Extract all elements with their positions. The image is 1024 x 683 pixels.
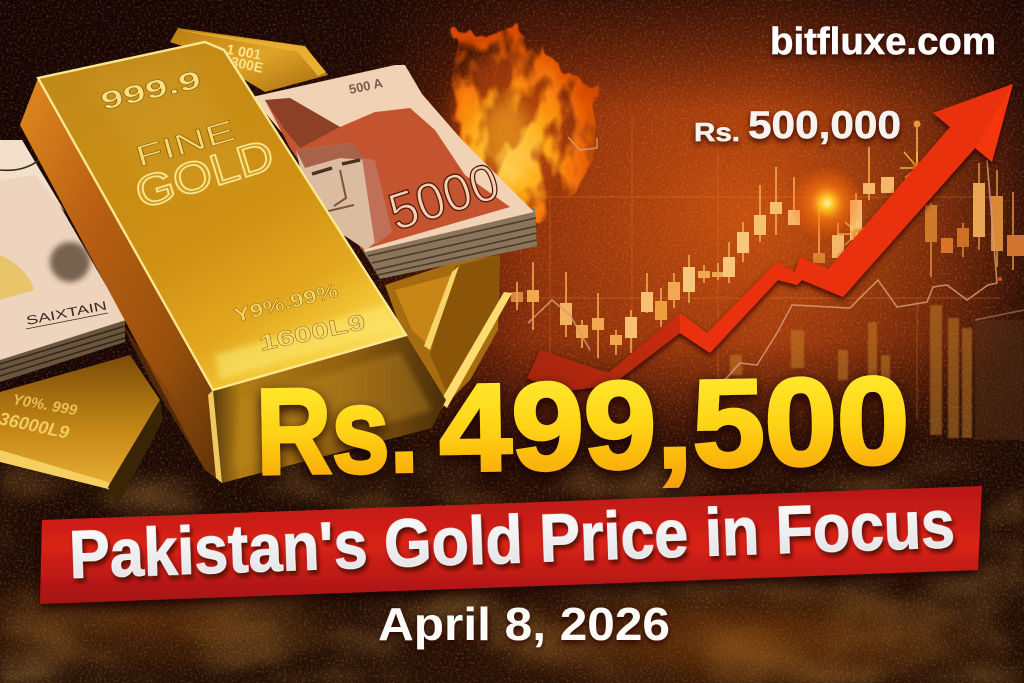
back gold bar: .1 001 <box>221 40 263 63</box>
back gold bar <box>170 28 328 92</box>
banknote stack right: 5000 rupees <box>252 65 537 279</box>
dim lower bars <box>730 305 1024 440</box>
date: April 8, 2026 <box>378 598 670 650</box>
headline price: Rs. 499,500: 499,500 <box>438 352 910 498</box>
banknote stack right: 5000 rupees: 5000 <box>382 153 506 242</box>
banknote stack left <box>0 140 126 382</box>
chart grid <box>500 115 1000 420</box>
stamped bar text: GOLD <box>130 130 280 219</box>
candlestick chart <box>511 120 1024 358</box>
note portrait <box>296 143 392 250</box>
thin price line <box>528 137 1024 382</box>
stamped bar text: Y9%.99% <box>232 281 340 327</box>
brand: bitfluxe.com: bitfluxe.com <box>770 21 996 63</box>
red title banner <box>40 486 982 604</box>
value label: Rs. 500,000: 500,000 <box>748 104 901 147</box>
back gold bar: 300E <box>229 53 265 76</box>
stamped bar text <box>98 66 368 356</box>
value label: Rs. 500,000 <box>694 104 901 147</box>
glow and sparkles <box>789 152 934 250</box>
value label: Rs. 500,000: Rs. <box>694 117 740 147</box>
headline price: Rs. 499,500 <box>255 352 910 500</box>
stamped bar text: 999.9 <box>98 66 204 116</box>
main gold bar: FINE GOLD <box>20 42 446 483</box>
rear gold bars right <box>385 255 512 410</box>
red rising arrow <box>527 84 1013 392</box>
stamped bar text: FINE <box>132 115 239 174</box>
banknote stack left: SAIXTAIN <box>25 299 108 328</box>
fire flames <box>440 28 600 225</box>
banknote stack right: 5000 rupees: 500 A <box>348 75 385 97</box>
lower left gold bar reflection <box>0 355 163 505</box>
lower left gold bar reflection: Y0%. 999 <box>11 391 79 419</box>
headline price: Rs. 499,500: Rs. <box>255 361 419 500</box>
stamped bar text: 1600L9 <box>257 309 368 356</box>
